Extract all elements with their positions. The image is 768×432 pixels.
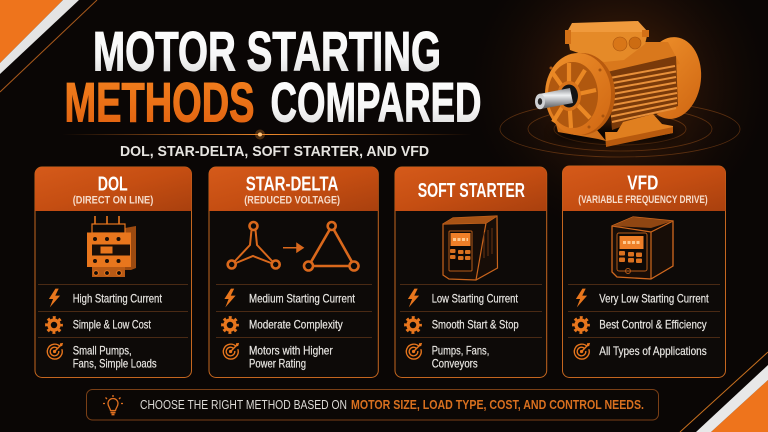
- icon: contactor: [87, 216, 136, 277]
- arrow: star to delta: [283, 244, 303, 252]
- icon: gear: [223, 318, 237, 332]
- title divider with glowing dot: [62, 130, 472, 140]
- text: starting current: High Starting Current: [73, 291, 163, 305]
- SOFT STARTER header band: [395, 167, 547, 211]
- VFD heading: VFD: [627, 172, 658, 194]
- text: applications: Fans, Simple Loads: [73, 356, 157, 370]
- SOFT STARTER heading: SOFT STARTER: [418, 180, 525, 202]
- icon: target: [574, 343, 590, 359]
- VFD header band: [562, 166, 726, 211]
- icon: lightning bolt: [576, 289, 587, 307]
- icon: lightning bolt: [408, 289, 419, 307]
- icon: star connection: [228, 222, 280, 268]
- motor illustration: [500, 21, 740, 157]
- callout bar: [86, 390, 658, 420]
- text: applications: Conveyors: [432, 356, 478, 370]
- text: starting current: Low Starting Current: [432, 291, 519, 305]
- panel: SOFT STARTER: [395, 167, 547, 378]
- text: complexity: Simple & Low Cost: [73, 318, 152, 332]
- panel: VFD: [562, 166, 726, 378]
- DOL subheading: (DIRECT ON LINE): [73, 194, 154, 206]
- callout text: CHOOSE THE RIGHT METHOD BASED ON: [140, 398, 347, 412]
- text: applications: Small Pumps,: [73, 344, 132, 358]
- icon: light bulb: [103, 395, 123, 414]
- DOL header band: [35, 167, 192, 211]
- text: applications: Pumps, Fans,: [432, 344, 489, 358]
- STAR-DELTA header band: [209, 167, 378, 211]
- text: applications: [73, 344, 157, 370]
- title: COMPARED: [270, 70, 482, 134]
- text: complexity: Smooth Start & Stop: [432, 318, 519, 332]
- panel: DOL: [35, 167, 192, 378]
- text: complexity: Best Control & Efficiency: [599, 318, 707, 332]
- VFD subheading: (VARIABLE FREQUENCY DRIVE): [578, 194, 708, 206]
- subtitle: DOL, STAR-DELTA, SOFT STARTER, AND VFD: [120, 143, 429, 160]
- callout text: [140, 398, 644, 412]
- title: [64, 20, 482, 134]
- text: starting current: Medium Starting Current: [249, 291, 356, 305]
- DOL heading: DOL: [98, 174, 128, 196]
- text: applications: Power Rating: [249, 356, 306, 370]
- icon: target: [47, 343, 63, 359]
- icon: soft starter unit: [443, 216, 498, 280]
- text: starting current: Very Low Starting Current: [599, 291, 709, 305]
- top-left corner accent: [0, 0, 97, 92]
- icon: gear: [47, 318, 61, 332]
- icon: gear: [406, 318, 420, 332]
- text: applications: [432, 344, 489, 370]
- title: MOTOR STARTING: [93, 20, 441, 82]
- icon: lightning bolt: [49, 289, 60, 307]
- icon: target: [223, 343, 239, 359]
- icon: target: [406, 343, 422, 359]
- bottom-right corner accent: [680, 352, 768, 432]
- icon: delta connection: [304, 222, 358, 270]
- title: METHODS: [64, 70, 254, 134]
- STAR-DELTA heading: STAR-DELTA: [246, 174, 338, 196]
- icon: lightning bolt: [224, 289, 236, 307]
- callout text: MOTOR SIZE, LOAD TYPE, COST, AND CONTROL NEEDS.: [351, 398, 644, 412]
- text: complexity: Moderate Complexity: [249, 318, 343, 332]
- text: applications: [249, 344, 333, 370]
- text: applications: All Types of Applications: [599, 344, 707, 358]
- panel: STAR-DELTA: [209, 167, 378, 378]
- icon: variable frequency drive unit: [612, 217, 673, 279]
- icon: gear: [574, 318, 588, 332]
- STAR-DELTA subheading: (REDUCED VOLTAGE): [244, 194, 340, 206]
- text: applications: Motors with Higher: [249, 344, 333, 358]
